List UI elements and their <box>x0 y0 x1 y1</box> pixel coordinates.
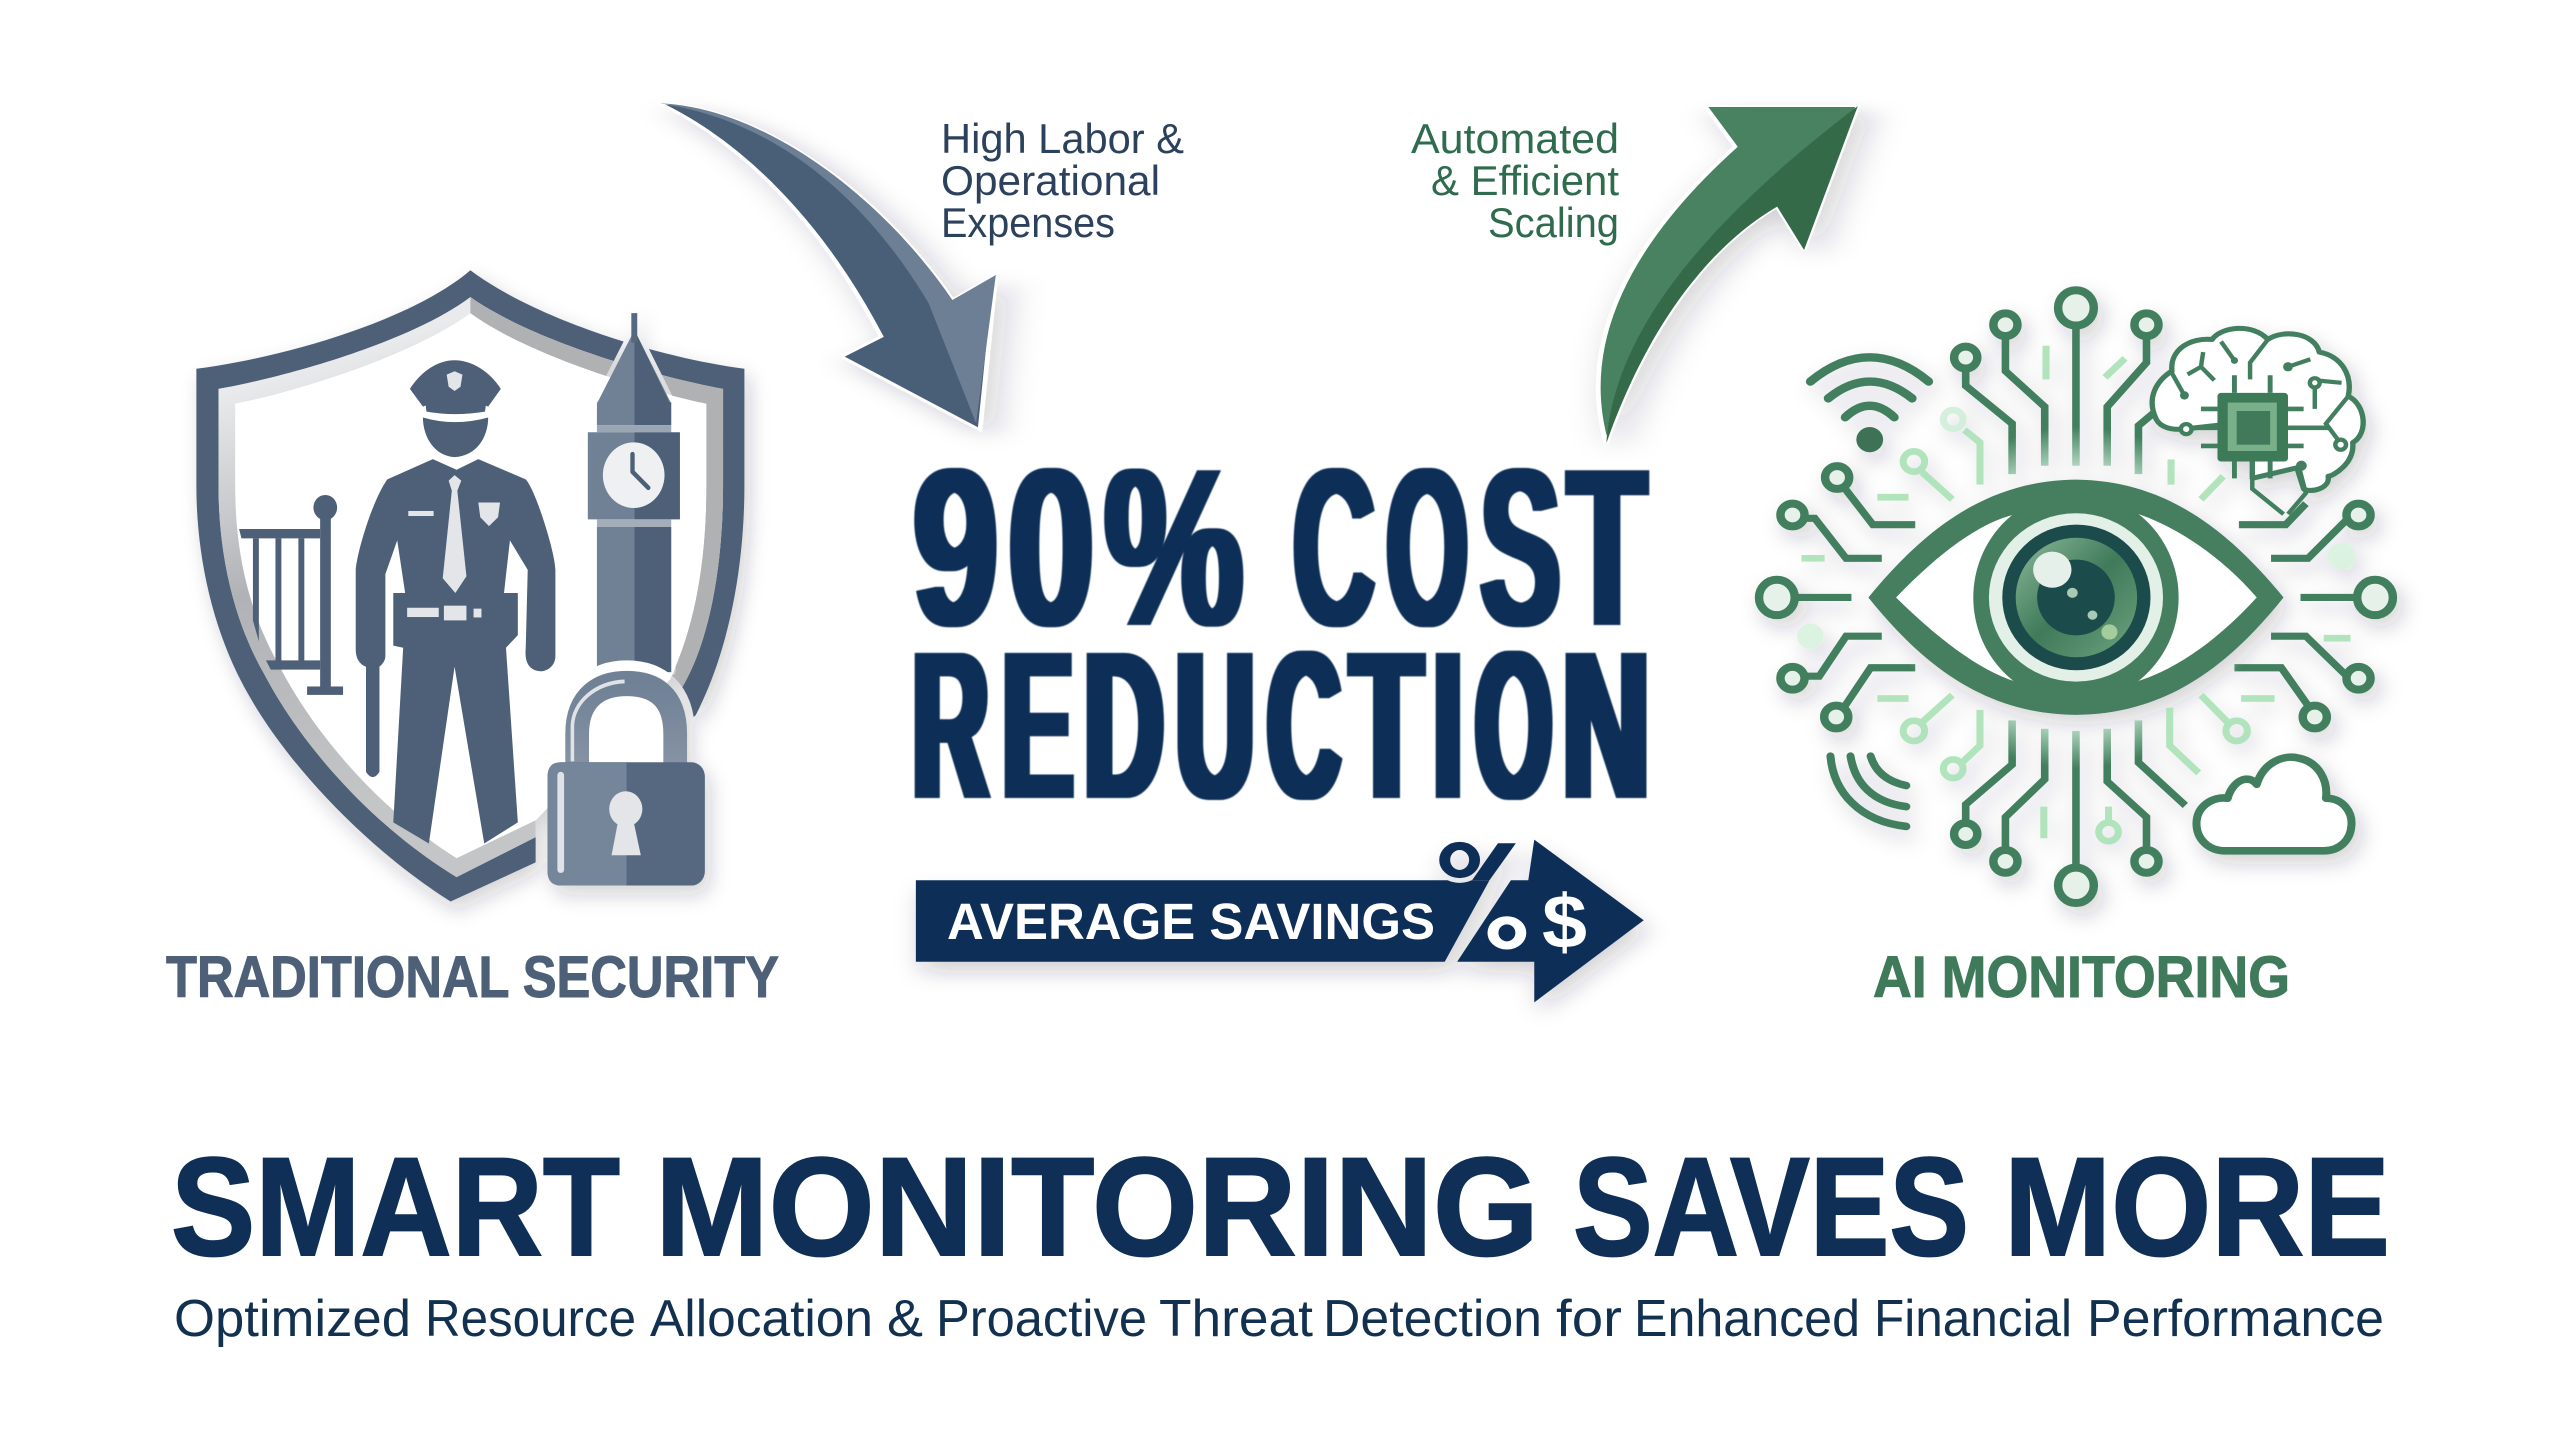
headline: 90% cost: C <box>1293 421 1375 673</box>
shield <box>196 270 744 902</box>
gate fence <box>239 495 343 695</box>
dollar sign: $ <box>1542 880 1587 965</box>
headline: 90% cost: % <box>1104 421 1244 673</box>
headline: 90% cost: 9 <box>913 421 998 673</box>
headline: reduction: C <box>1268 607 1340 843</box>
text: automated and efficient scaling: & Efficient <box>1431 157 1619 204</box>
subtitle: Allocation <box>650 1290 873 1348</box>
text: automated and efficient scaling: Automated <box>1411 115 1619 162</box>
text: high labor and operational expenses: Expenses <box>941 199 1115 246</box>
headline: reduction: D <box>1084 607 1164 843</box>
headline: reduction: I <box>1434 607 1462 843</box>
subtitle: Performance <box>2087 1290 2384 1348</box>
headline: reduction: U <box>1176 607 1254 843</box>
circuit traces <box>1797 325 2355 868</box>
subtitle: for <box>1556 1290 1622 1348</box>
subtitle: Proactive <box>936 1290 1147 1348</box>
banner: average savings arrow <box>916 840 1644 1002</box>
wifi icon <box>1810 357 1929 452</box>
subtitle: Enhanced <box>1634 1290 1860 1348</box>
arrow shape with percent <box>916 840 1644 1002</box>
headline: 90% cost <box>913 421 1647 673</box>
headline: 90% cost: T <box>1567 421 1647 673</box>
infographic canvas <box>166 103 2412 1347</box>
title: smart monitoring saves more: MORE <box>2004 1128 2390 1285</box>
label: average savings: AVERAGE SAVINGS <box>947 893 1435 950</box>
title: smart monitoring saves more: SMART <box>171 1128 620 1285</box>
title: smart monitoring saves more: MONITORING <box>655 1128 1539 1285</box>
subtitle: Resource <box>425 1290 636 1348</box>
headline: reduction: O <box>1476 607 1552 843</box>
panel: ai monitoring icon <box>1759 290 2393 903</box>
headline: reduction: E <box>1003 607 1073 843</box>
headline: 90% cost: S <box>1480 421 1561 673</box>
text: automated and efficient scaling: Scaling <box>1488 199 1619 246</box>
signal waves <box>1830 756 1906 826</box>
security officer <box>356 360 555 843</box>
subtitle: & <box>887 1290 923 1348</box>
text: high labor and operational expenses <box>941 115 1184 246</box>
padlock <box>547 681 705 886</box>
label: traditional security: TRADITIONAL SECURITY <box>166 945 779 1010</box>
headline: reduction: N <box>1562 607 1650 843</box>
headline: 90% cost: 0 <box>1008 421 1094 673</box>
arrow: efficient up <box>1598 106 1858 443</box>
arrow: high cost down <box>660 103 996 430</box>
light traces <box>1797 346 2356 841</box>
panel: traditional security icon <box>196 270 744 902</box>
circuit nodes <box>1759 290 2393 903</box>
title: smart monitoring saves more: SAVES <box>1573 1128 1969 1285</box>
text: high labor and operational expenses: High Labor & <box>941 115 1184 162</box>
headline: 90% cost: O <box>1386 421 1468 673</box>
cloud <box>2196 757 2352 851</box>
clock tower <box>588 313 680 672</box>
headline: reduction: T <box>1351 607 1422 843</box>
subtitle: Financial <box>1874 1290 2072 1348</box>
subtitle: Detection <box>1323 1290 1542 1348</box>
eye <box>1868 480 2284 715</box>
brain with chip <box>2152 328 2363 514</box>
subtitle: Threat <box>1159 1290 1314 1348</box>
subtitle: Optimized <box>174 1290 411 1348</box>
text: automated and efficient scaling <box>1411 115 1619 246</box>
text: high labor and operational expenses: Operational <box>941 157 1160 204</box>
label: ai monitoring: AI MONITORING <box>1873 945 2290 1010</box>
headline: reduction <box>913 607 1650 843</box>
headline: reduction: R <box>913 607 988 843</box>
